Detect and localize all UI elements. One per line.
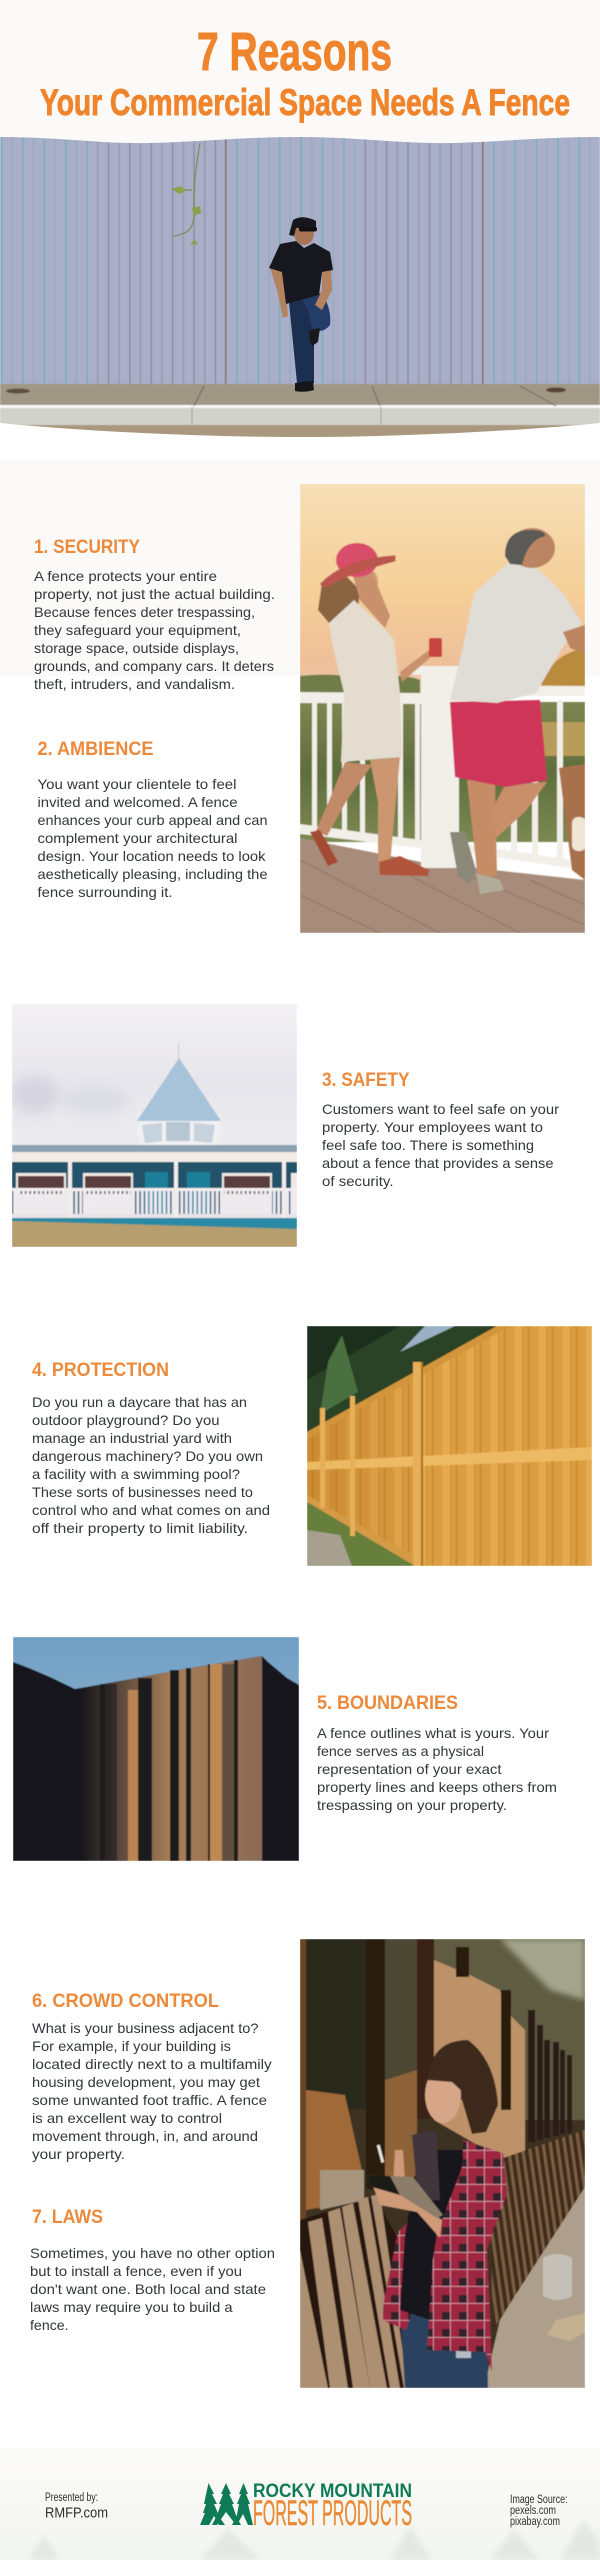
body: safety: property. Your employees want to xyxy=(322,1119,543,1135)
body: ambience: design. Your location needs to look xyxy=(38,848,267,864)
photo: couple on a deck with white railing xyxy=(300,484,586,933)
section 2: ambience xyxy=(38,738,268,900)
body: laws: don't want one. Both local and state xyxy=(30,2281,266,2297)
logo: rocky mountain forest products: ROCKY MOUNTAIN xyxy=(253,2481,412,2502)
body: boundaries: representation of your exact xyxy=(317,1761,502,1777)
body: security: property, not just the actual building. xyxy=(34,586,275,602)
footer: FOREST PRODUCTS xyxy=(253,2494,412,2533)
body: laws: but to install a fence, even if you xyxy=(30,2263,242,2279)
section 4: protection xyxy=(32,1359,270,1536)
heading: ambience: 2. AMBIENCE xyxy=(38,738,154,760)
body: protection: control who and what comes on and xyxy=(32,1502,270,1518)
photo: cedar privacy fence xyxy=(307,1326,592,1566)
heading: safety: 3. SAFETY xyxy=(322,1069,410,1091)
woman in dress and pink hat xyxy=(310,543,442,876)
image source xyxy=(510,2494,568,2528)
image source: Image Source: xyxy=(510,2494,568,2506)
section 6: crowd control xyxy=(32,1990,272,2162)
body: boundaries: A fence outlines what is yours. Your xyxy=(317,1725,549,1741)
body: security: A fence protects your entire xyxy=(34,568,217,584)
body: ambience: complement your architectural xyxy=(38,830,237,846)
presented by: RMFP.com xyxy=(45,2504,108,2522)
wicker chair xyxy=(559,764,586,880)
body: safety xyxy=(322,1101,559,1189)
body: protection: Do you run a daycare that has an xyxy=(32,1394,247,1410)
body: ambience: fence surrounding it. xyxy=(38,884,172,900)
body: crowd control: is an excellent way to control xyxy=(32,2110,222,2126)
woman in plaid shirt xyxy=(367,2040,507,2388)
body: protection: manage an industrial yard with xyxy=(32,1430,232,1446)
body: crowd control: movement through, in, and around xyxy=(32,2128,258,2144)
vine xyxy=(172,143,201,245)
body: crowd control: your property. xyxy=(32,2146,125,2162)
man xyxy=(269,217,333,392)
body: protection: a facility with a swimming pool? xyxy=(32,1466,240,1482)
photo: dark and bronze slatted fence xyxy=(13,1637,299,1861)
body: ambience: aesthetically pleasing, including the xyxy=(38,866,268,882)
body: boundaries xyxy=(317,1725,557,1813)
title xyxy=(40,22,570,123)
body: boundaries: trespassing on your property. xyxy=(317,1797,507,1813)
body: security: theft, intruders, and vandalism. xyxy=(34,676,235,692)
body: security: storage space, outside displays, xyxy=(34,640,239,656)
faded forest silhouettes xyxy=(28,2520,600,2560)
body: boundaries: fence serves as a physical xyxy=(317,1743,484,1759)
heading: boundaries: 5. BOUNDARIES xyxy=(317,1692,458,1714)
body: laws xyxy=(30,2245,275,2333)
body: protection: These sorts of businesses need to xyxy=(32,1484,253,1500)
section 1: security xyxy=(34,536,275,692)
presented by: Presented by: xyxy=(45,2492,98,2504)
body: security: they safeguard your equipment, xyxy=(34,622,241,638)
logo: rocky mountain forest products xyxy=(200,2481,412,2533)
body: safety: feel safe too. There is something xyxy=(322,1137,534,1153)
icon: three pine trees xyxy=(200,2483,253,2525)
body: crowd control: located directly next to a multifamily xyxy=(32,2056,272,2072)
body: security: Because fences deter trespassing, xyxy=(34,604,255,620)
body: boundaries: property lines and keeps others from xyxy=(317,1779,557,1795)
photo: woman with tablet by wooden fence xyxy=(300,1939,585,2388)
body: crowd control: some unwanted foot traffic. A fence xyxy=(32,2092,267,2108)
body: ambience: enhances your curb appeal and can xyxy=(38,812,268,828)
heading: protection: 4. PROTECTION xyxy=(32,1359,169,1381)
body: security: grounds, and company cars. It deters xyxy=(34,658,274,674)
man in white shirt and red shorts xyxy=(450,528,585,894)
body: laws: Sometimes, you have no other option xyxy=(30,2245,275,2261)
body: ambience: You want your clientele to feel xyxy=(38,776,236,792)
photo: blue building with white porch railing xyxy=(11,1004,297,1247)
body: protection xyxy=(32,1394,270,1536)
body: ambience xyxy=(38,776,268,900)
heading: crowd control: 6. CROWD CONTROL xyxy=(32,1990,219,2012)
section 3: safety xyxy=(322,1069,559,1189)
body: crowd control xyxy=(32,2020,272,2162)
footer xyxy=(0,2448,600,2560)
body: protection: off their property to limit liability. xyxy=(32,1520,248,1536)
body: laws: laws may require you to build a xyxy=(30,2299,233,2315)
body: safety: of security. xyxy=(322,1173,394,1189)
body: ambience: invited and welcomed. A fence xyxy=(38,794,238,810)
body: laws: fence. xyxy=(30,2317,69,2333)
section 7: laws xyxy=(30,2206,275,2333)
body: protection: outdoor playground? Do you xyxy=(32,1412,220,1428)
hero photo: man leaning on fence xyxy=(0,130,600,439)
image source: pixabay.com xyxy=(510,2516,560,2528)
heading: laws: 7. LAWS xyxy=(32,2206,103,2228)
body: crowd control: What is your business adjacent to? xyxy=(32,2020,259,2036)
heading: security: 1. SECURITY xyxy=(34,536,140,558)
body: protection: dangerous machinery? Do you own xyxy=(32,1448,263,1464)
image source: pexels.com xyxy=(510,2505,556,2517)
presented by xyxy=(45,2492,108,2522)
body: safety: Customers want to feel safe on your xyxy=(322,1101,559,1117)
body: crowd control: housing development, you may get xyxy=(32,2074,260,2090)
body: safety: about a fence that provides a sense xyxy=(322,1155,554,1171)
body: security xyxy=(34,568,275,692)
body: crowd control: For example, if your building is xyxy=(32,2038,231,2054)
section 5: boundaries xyxy=(317,1692,557,1813)
title: 7 Reasons xyxy=(197,22,392,82)
